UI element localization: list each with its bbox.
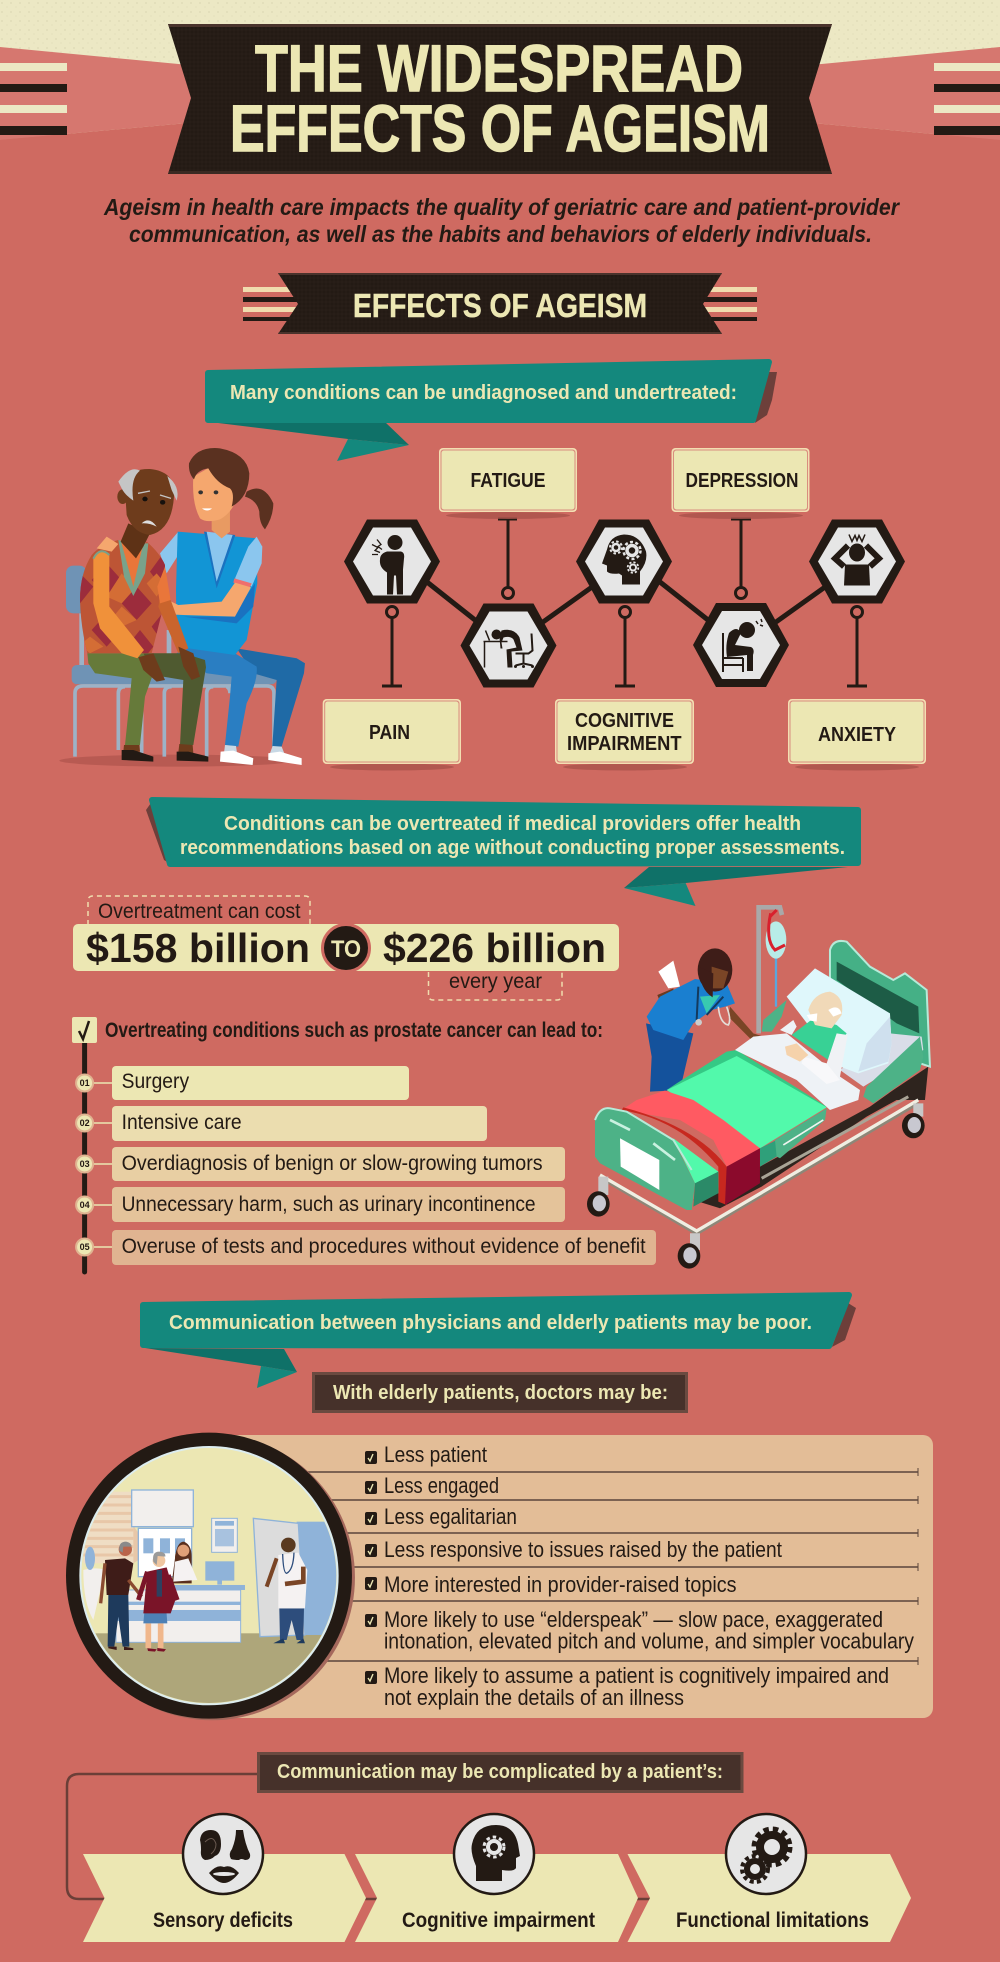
list heading: Overtreating conditions such as prostate cancer can lead to: bbox=[105, 1019, 603, 1042]
foot of bed bbox=[595, 1108, 718, 1210]
title banner: EFFECTS OF AGEISM bbox=[230, 91, 770, 165]
section banner: effects of ageism bbox=[243, 273, 757, 334]
box: depression bbox=[672, 448, 810, 519]
icon: head with gear bbox=[454, 1814, 534, 1894]
box: pain bbox=[323, 699, 461, 770]
hexagon: depression bbox=[693, 603, 789, 687]
list item: intensive care bbox=[112, 1106, 487, 1141]
iv pole and bag bbox=[759, 907, 786, 1033]
header stripes right bbox=[934, 63, 1000, 135]
panel: doctor behaviours: not explain the details of an illness bbox=[384, 1685, 684, 1710]
cost bar bbox=[73, 924, 619, 972]
nurse bbox=[158, 448, 305, 765]
box: pain: PAIN bbox=[369, 721, 410, 744]
hexagon: cognitive impairment bbox=[576, 520, 672, 604]
nurse bbox=[646, 948, 773, 1092]
title: THE WIDESPREAD bbox=[255, 31, 743, 105]
illustration: nurse and patient in hospital bed bbox=[587, 907, 930, 1269]
illustration: patient and nurse bbox=[59, 448, 305, 767]
box: cognitive impairment bbox=[555, 699, 694, 770]
illustration: clinic scene in circular frame bbox=[66, 1433, 355, 1720]
callout: overtreated: recommendations based on age without conducting proper assessments. bbox=[180, 837, 845, 859]
callout: undiagnosed bbox=[208, 362, 777, 461]
panel: doctor behaviours: Less egalitarian bbox=[384, 1504, 517, 1529]
list timeline: 05 bbox=[80, 1242, 90, 1252]
box: fatigue bbox=[439, 448, 577, 519]
to badge: TO bbox=[331, 936, 361, 963]
patients bbox=[101, 1542, 177, 1652]
reception desk bbox=[116, 1542, 245, 1642]
list item: overdiagnosis bbox=[112, 1147, 565, 1181]
floor bbox=[96, 1633, 322, 1703]
hexagon: anxiety bbox=[809, 520, 905, 604]
chevron: functional limitations: Functional limitations bbox=[676, 1909, 869, 1932]
intro text: communication, as well as the habits and behaviors of elderly individuals. bbox=[129, 221, 872, 247]
intro text bbox=[103, 194, 901, 247]
white blanket bbox=[735, 1033, 860, 1110]
chevron: sensory deficits bbox=[83, 1814, 366, 1942]
list timeline: 02 bbox=[80, 1118, 90, 1128]
pillow and mattress head bbox=[762, 968, 923, 1103]
panel: doctor behaviours: More likely to assume a patient is cognitively impaired and bbox=[384, 1663, 889, 1688]
title banner bbox=[168, 24, 832, 174]
patient bbox=[780, 992, 848, 1084]
label: with elderly patients: With elderly patients, doctors may be: bbox=[333, 1381, 668, 1404]
bed frame and wheels bbox=[587, 1067, 928, 1269]
checkboxes bbox=[365, 1451, 377, 1684]
panel: doctor behaviours: Less engaged bbox=[384, 1473, 499, 1498]
panel: doctor behaviours: intonation, elevated pitch and volume, and simpler vocabulary bbox=[384, 1628, 914, 1654]
headboard bbox=[830, 941, 930, 1067]
list item: surgery: Surgery bbox=[122, 1069, 189, 1093]
checkbox bbox=[72, 1017, 97, 1043]
callout: communication bbox=[143, 1295, 856, 1388]
box: anxiety: ANXIETY bbox=[818, 723, 896, 746]
pin: depression bbox=[731, 519, 751, 598]
panel: doctor behaviours: Less patient bbox=[384, 1442, 487, 1467]
callout: communication: Communication between physicians and elderly patients may be poor. bbox=[169, 1312, 812, 1334]
pin: cognitive impairment bbox=[615, 606, 635, 686]
header stripes left bbox=[0, 63, 67, 135]
label: communication may be complicated: Communication may be complicated by a patient’s: bbox=[277, 1760, 723, 1783]
list item: overuse of tests bbox=[112, 1230, 656, 1265]
list item: unnecessary harm: Unnecessary harm, such as urinary incontinence bbox=[122, 1192, 536, 1216]
box: cognitive impairment: IMPAIRMENT bbox=[567, 732, 682, 755]
panel: doctor behaviours bbox=[190, 1435, 933, 1718]
box: fatigue: FATIGUE bbox=[470, 469, 546, 492]
list item: overuse of tests: Overuse of tests and procedures without evidence of benefit bbox=[122, 1234, 646, 1258]
hexagon: pain bbox=[344, 520, 440, 604]
connector lines between hexagons bbox=[427, 582, 825, 622]
cost bar: $226 billion bbox=[383, 925, 606, 971]
callout: overtreated: Conditions can be overtreated if medical providers offer health bbox=[224, 813, 801, 835]
label: communication may be complicated bbox=[257, 1752, 744, 1793]
callout: undiagnosed: Many conditions can be undiagnosed and undertreated: bbox=[230, 382, 737, 404]
box: cognitive impairment: COGNITIVE bbox=[575, 709, 674, 732]
cost bar: $158 billion bbox=[86, 925, 310, 971]
icon: gears bbox=[726, 1814, 806, 1894]
pin: fatigue bbox=[498, 519, 517, 598]
box: depression: DEPRESSION bbox=[686, 469, 798, 492]
panel: doctor behaviours: More interested in provider-raised topics bbox=[384, 1572, 736, 1597]
calendar bbox=[212, 1518, 237, 1552]
chevron: cognitive impairment: Cognitive impairment bbox=[402, 1909, 595, 1932]
icon: ear, nose and lips bbox=[183, 1814, 263, 1894]
label: every year bbox=[428, 970, 562, 1000]
intro text: Ageism in health care impacts the quality of geriatric care and patient-provider bbox=[103, 194, 901, 220]
window with blinds bbox=[83, 1490, 193, 1620]
list item: intensive care: Intensive care bbox=[122, 1110, 242, 1134]
connector: communication label to chevrons bbox=[67, 1774, 651, 1899]
chevron: cognitive impairment bbox=[355, 1814, 638, 1942]
label: overtreatment can cost: Overtreatment can cost bbox=[98, 900, 301, 923]
older man bbox=[80, 469, 208, 762]
label: every year: every year bbox=[449, 970, 542, 993]
list timeline: 01 bbox=[80, 1078, 90, 1088]
pin: anxiety bbox=[847, 606, 867, 686]
panel: doctor behaviours: More likely to use “elderspeak” — slow pace, exaggerated bbox=[384, 1607, 883, 1632]
label: with elderly patients bbox=[312, 1372, 688, 1413]
list item: unnecessary harm bbox=[112, 1187, 565, 1222]
pin: pain bbox=[382, 606, 402, 686]
list timeline: 03 bbox=[80, 1159, 90, 1169]
panel: doctor behaviours: Less responsive to issues raised by the patient bbox=[384, 1537, 782, 1562]
side rail bbox=[760, 1108, 827, 1167]
header backdrop bbox=[0, 0, 1000, 200]
chevron: sensory deficits: Sensory deficits bbox=[153, 1909, 293, 1932]
list item: surgery bbox=[112, 1066, 409, 1100]
hexagon: fatigue bbox=[460, 604, 556, 688]
list timeline: 04 bbox=[80, 1200, 90, 1210]
list timeline bbox=[72, 1017, 112, 1272]
callout: overtreated bbox=[146, 800, 858, 906]
box: anxiety bbox=[788, 699, 926, 770]
section banner: effects of ageism: EFFECTS OF AGEISM bbox=[353, 287, 647, 324]
mattress and sheet bbox=[667, 1050, 827, 1148]
chevron: functional limitations bbox=[628, 1814, 911, 1942]
to badge bbox=[322, 924, 370, 972]
list item: overdiagnosis: Overdiagnosis of benign or slow-growing tumors bbox=[122, 1151, 543, 1175]
red blanket bbox=[622, 1091, 760, 1205]
door and doctor bbox=[253, 1518, 340, 1643]
